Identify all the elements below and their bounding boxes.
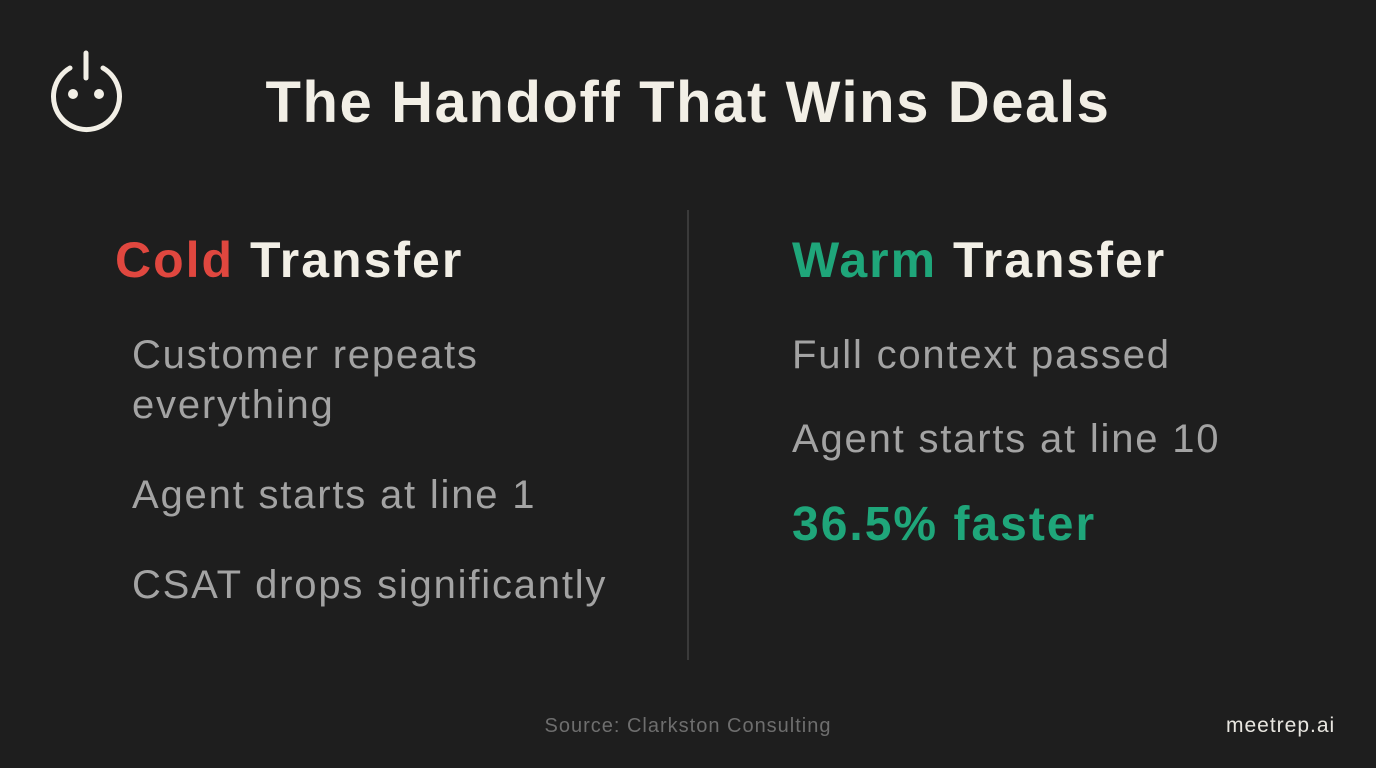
brand: meetrep.ai <box>1226 714 1335 737</box>
source: Source: Clarkston Consulting <box>544 715 832 737</box>
text: cold points: Customer repeats <box>132 333 479 377</box>
panel: cold transfer <box>115 232 607 607</box>
divider <box>687 210 689 660</box>
text: warm points: Full context passed Agent starts at line 10 <box>792 333 1220 461</box>
stat: 36.5% faster: 36.5% faster <box>792 498 1096 551</box>
heading: warm transfer: Warm Transfer <box>792 232 1166 288</box>
text: cold points: everything Agent starts at line 1 CSAT drops significantly <box>132 383 607 607</box>
heading: cold transfer: Cold Transfer <box>115 232 463 288</box>
icon: power logo <box>51 50 122 132</box>
panel: warm transfer <box>792 232 1220 551</box>
title: The Handoff That Wins Deals <box>265 70 1111 135</box>
